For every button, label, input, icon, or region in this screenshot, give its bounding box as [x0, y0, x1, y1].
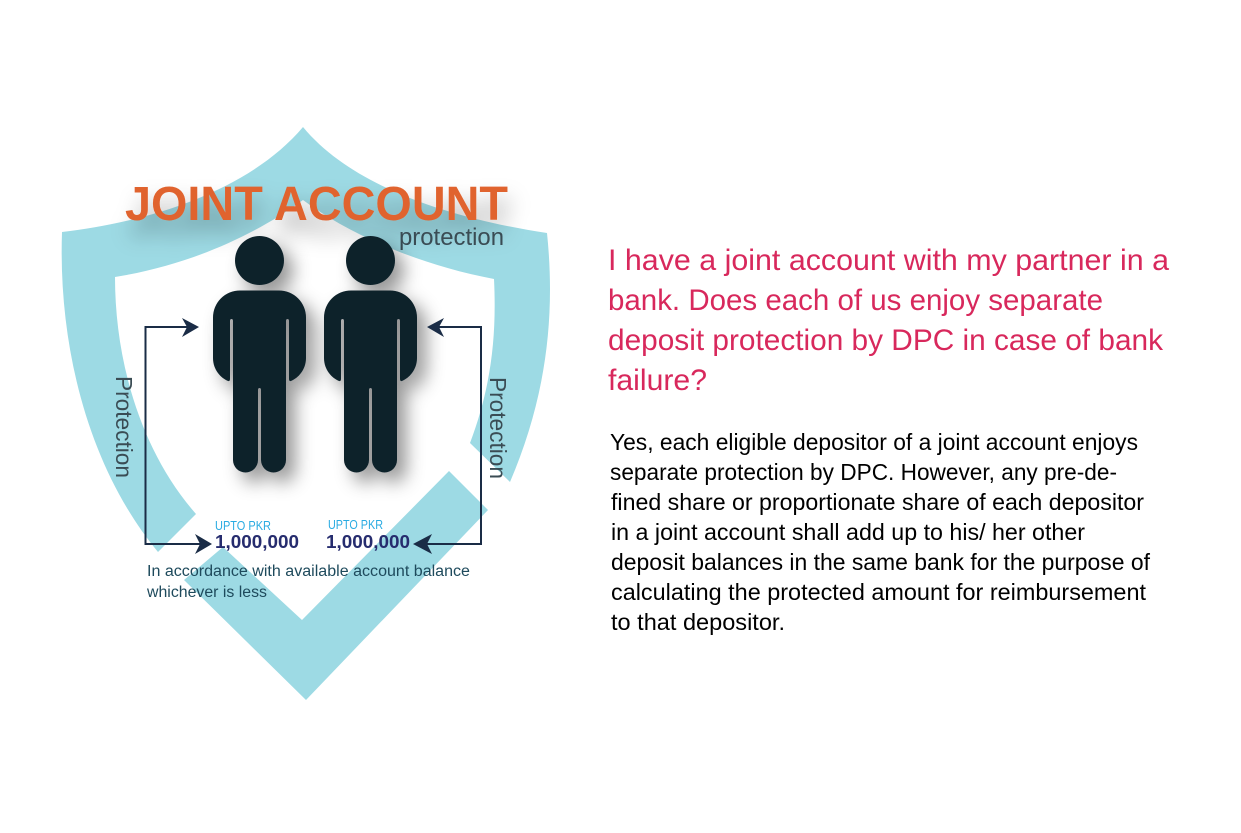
answer text: calculating the protected amount for reimbursement — [611, 579, 1146, 605]
question heading: failure? — [608, 364, 707, 397]
question heading: bank. Does each of us enjoy separate — [608, 284, 1103, 317]
subtitle: protection: protection — [399, 224, 504, 251]
answer text: to that depositor. — [611, 609, 785, 635]
question heading — [608, 244, 1170, 397]
arrow: left protection loop — [146, 318, 212, 554]
amount: left person: 1,000,000 — [215, 531, 299, 552]
label: protection left: Protection — [111, 376, 137, 478]
question heading: I have a joint account with my partner in a — [608, 244, 1170, 277]
answer text — [610, 429, 1150, 635]
icon: person right — [324, 236, 417, 472]
amount: right person: 1,000,000 — [326, 531, 410, 552]
answer text: Yes, each eligible depositor of a joint account enjoys — [610, 429, 1138, 455]
answer text: in a joint account shall add up to his/ her other — [611, 519, 1085, 545]
label: protection right: Protection — [485, 377, 511, 479]
amount: right person — [326, 517, 410, 552]
amount: right person: UPTO PKR — [328, 517, 383, 532]
arrow: right protection loop — [413, 318, 481, 554]
note: account balance — [146, 563, 470, 601]
title: JOINT ACCOUNT — [125, 177, 508, 231]
shield background — [62, 127, 550, 700]
icon: two people — [213, 236, 417, 472]
answer text: fined share or proportionate share of each depositor — [611, 489, 1144, 515]
question heading: deposit protection by DPC in case of bank — [608, 324, 1163, 357]
shield: check mark bottom — [184, 471, 488, 700]
note: account balance: In accordance with available account balance — [147, 563, 470, 580]
answer text: separate protection by DPC. However, any pre-de- — [610, 459, 1117, 485]
shield: top and sides band — [62, 127, 550, 552]
amount: left person — [215, 518, 299, 552]
icon: person left — [213, 236, 306, 472]
answer text: deposit balances in the same bank for the purpose of — [611, 549, 1150, 575]
note: account balance: whichever is less — [146, 584, 267, 601]
amount: left person: UPTO PKR — [215, 518, 271, 533]
